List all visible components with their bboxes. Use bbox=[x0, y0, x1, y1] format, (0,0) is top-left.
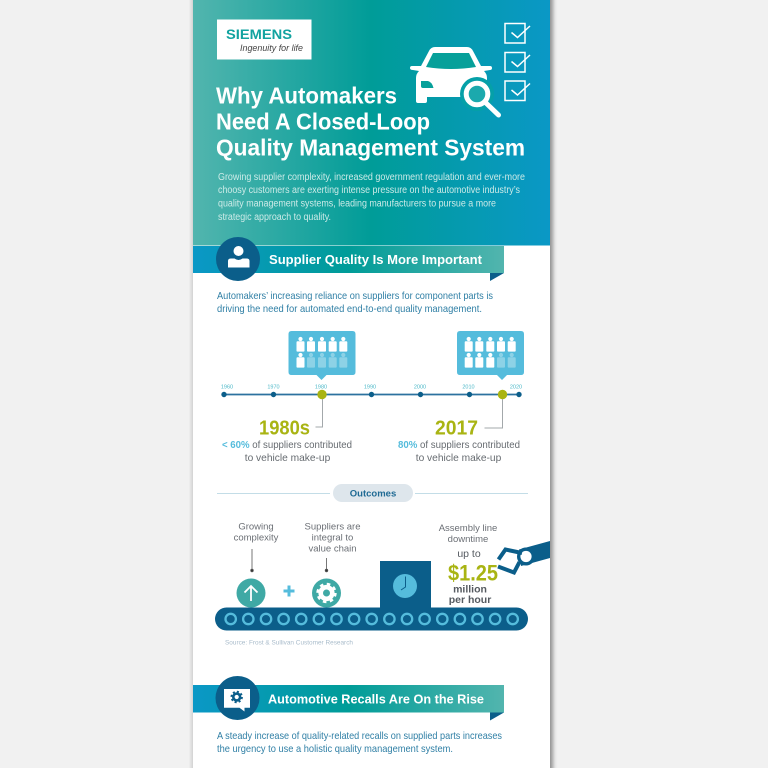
chart: timeline: 1960 bbox=[221, 384, 233, 390]
title: Why Automakers bbox=[216, 82, 397, 108]
text: recalls intro: the urgency to use a holistic quality management system. bbox=[217, 744, 453, 755]
label: growing complexity bbox=[234, 522, 279, 544]
stat: downtime cost: up to bbox=[457, 548, 481, 560]
icon: car with magnifier bbox=[410, 47, 498, 115]
icon: plus bbox=[284, 586, 294, 596]
intro text: Growing supplier complexity, increased government regulation and ever-more bbox=[218, 172, 525, 183]
stat: 2017: 2017 bbox=[435, 418, 478, 440]
pointer lines bbox=[251, 549, 328, 572]
section banner: recalls bbox=[193, 676, 504, 720]
text: recalls intro bbox=[217, 731, 502, 755]
title: Quality Management System bbox=[216, 134, 525, 160]
logo: Siemens bbox=[217, 20, 312, 60]
heading: outcomes: Outcomes bbox=[350, 488, 396, 500]
logo: Siemens: Ingenuity for life bbox=[240, 43, 303, 53]
label: suppliers integral: integral to bbox=[312, 532, 353, 544]
stat: downtime cost bbox=[439, 523, 498, 606]
chart: timeline: 1990 bbox=[364, 384, 376, 390]
icon: gear bbox=[312, 578, 341, 608]
panel: header bbox=[193, 0, 550, 246]
text: supplier intro: driving the need for automated end-to-end quality management. bbox=[217, 304, 482, 315]
stat: downtime cost: million bbox=[453, 584, 487, 596]
logo: Siemens: SIEMENS bbox=[226, 27, 292, 42]
machine with clock bbox=[380, 561, 431, 609]
text: supplier intro bbox=[217, 291, 493, 315]
callout: 1980s suppliers bbox=[288, 331, 356, 380]
section banner: supplier quality bbox=[193, 237, 504, 281]
stat: downtime cost: per hour bbox=[449, 594, 491, 606]
stat: 2017: to vehicle make-up bbox=[416, 453, 502, 464]
text: recalls intro: A steady increase of quality-related recalls on supplied parts increases bbox=[217, 731, 502, 742]
stat: 1980s: to vehicle make-up bbox=[245, 453, 331, 464]
stat: 2017 bbox=[398, 418, 520, 464]
icon: person bbox=[228, 246, 250, 268]
text: supplier intro: Automakers’ increasing reliance on suppliers for component parts is bbox=[217, 291, 493, 302]
section banner: supplier quality: Supplier Quality Is More Important bbox=[269, 252, 483, 267]
title bbox=[216, 82, 525, 160]
chart: timeline: 1970 bbox=[267, 384, 280, 390]
icon: speech bubble gear bbox=[224, 689, 250, 712]
icon: up arrow bbox=[236, 578, 266, 608]
stat: downtime cost: $1.25 bbox=[448, 560, 498, 586]
chart: timeline: 1980 bbox=[315, 384, 327, 390]
stat: 1980s bbox=[222, 418, 352, 464]
chart: timeline: 2020 bbox=[510, 384, 522, 390]
heading: outcomes bbox=[217, 484, 528, 502]
stat: 1980s: < 60% of suppliers contributed bbox=[222, 440, 352, 451]
label: suppliers integral: value chain bbox=[308, 544, 357, 554]
chart: timeline bbox=[221, 384, 522, 428]
title: Need A Closed-Loop bbox=[216, 108, 430, 134]
conveyor belt bbox=[215, 608, 528, 630]
chart: timeline: 2010 bbox=[462, 384, 475, 390]
stat: 1980s: 1980s bbox=[259, 418, 310, 440]
stat: downtime cost: Assembly line bbox=[439, 523, 497, 534]
intro text: choosy customers are exerting intense pressure on the automotive industry’s bbox=[218, 185, 520, 196]
label: suppliers integral bbox=[305, 522, 360, 554]
label: growing complexity: complexity bbox=[234, 532, 279, 544]
icon: robot arm bbox=[498, 541, 550, 572]
source note: Source: Frost & Sullivan Customer Research bbox=[225, 640, 353, 646]
label: growing complexity: Growing bbox=[238, 522, 274, 532]
intro text bbox=[218, 172, 525, 223]
icon: checklist bbox=[505, 24, 530, 100]
intro text: quality management systems, leading manufacturers to pursue a more bbox=[218, 198, 496, 210]
chart: timeline: 2000 bbox=[414, 384, 426, 390]
callout: 2017 suppliers bbox=[457, 331, 524, 380]
intro text: strategic approach to quality. bbox=[218, 212, 331, 223]
stat: 2017: 80% of suppliers contributed bbox=[398, 440, 520, 451]
stat: downtime cost: downtime bbox=[448, 534, 488, 545]
section banner: recalls: Automotive Recalls Are On the Rise bbox=[268, 692, 484, 706]
label: suppliers integral: Suppliers are bbox=[305, 522, 360, 532]
